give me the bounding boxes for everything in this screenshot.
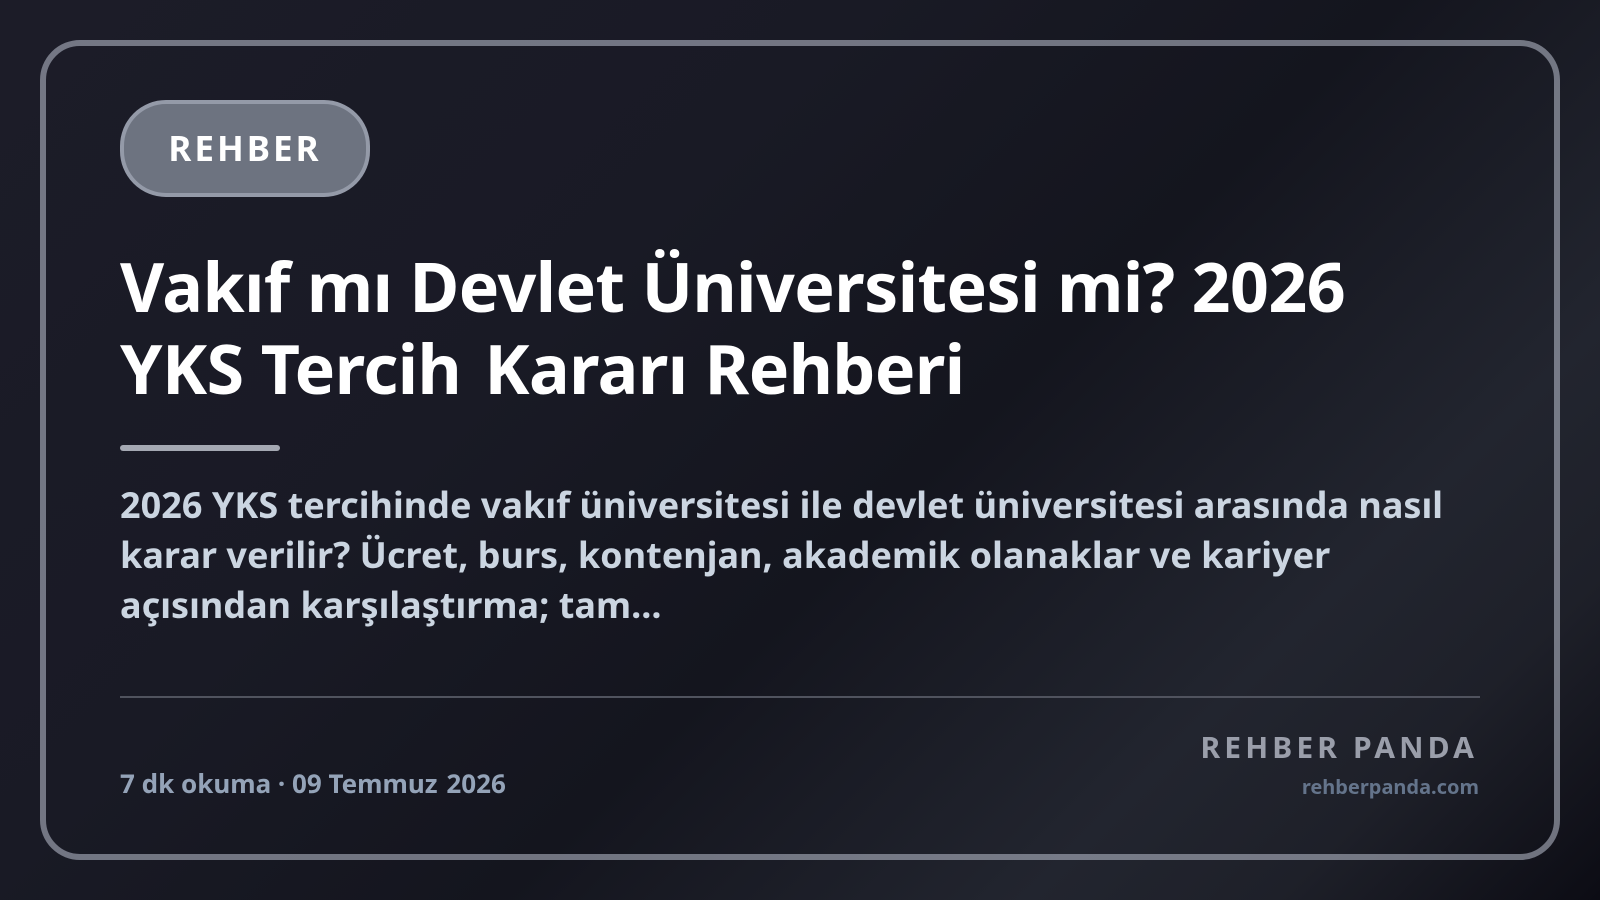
reading time and date: 7 dk okuma · 09 Temmuz 2026 — [120, 765, 506, 801]
accent rule — [120, 445, 280, 451]
title: YKS Tercih Kararı Rehberi — [120, 321, 965, 414]
description text: 2026 YKS tercihinde vakıf üniversitesi ile devlet üniversitesi arasında nasıl — [120, 480, 1443, 529]
title: Vakıf mı Devlet Üniversitesi mi? 2026 — [120, 239, 1345, 332]
description text: açısından karşılaştırma; tam... — [120, 580, 662, 629]
description text: karar verilir? Ücret, burs, kontenjan, akademik olanaklar ve kariyer — [120, 530, 1330, 579]
brand name: REHBER PANDA — [1200, 726, 1478, 767]
title — [120, 239, 1345, 414]
category badge — [120, 100, 370, 197]
description text — [120, 480, 1443, 629]
website url: rehberpanda.com — [1302, 773, 1479, 800]
category badge: REHBER — [168, 125, 322, 172]
